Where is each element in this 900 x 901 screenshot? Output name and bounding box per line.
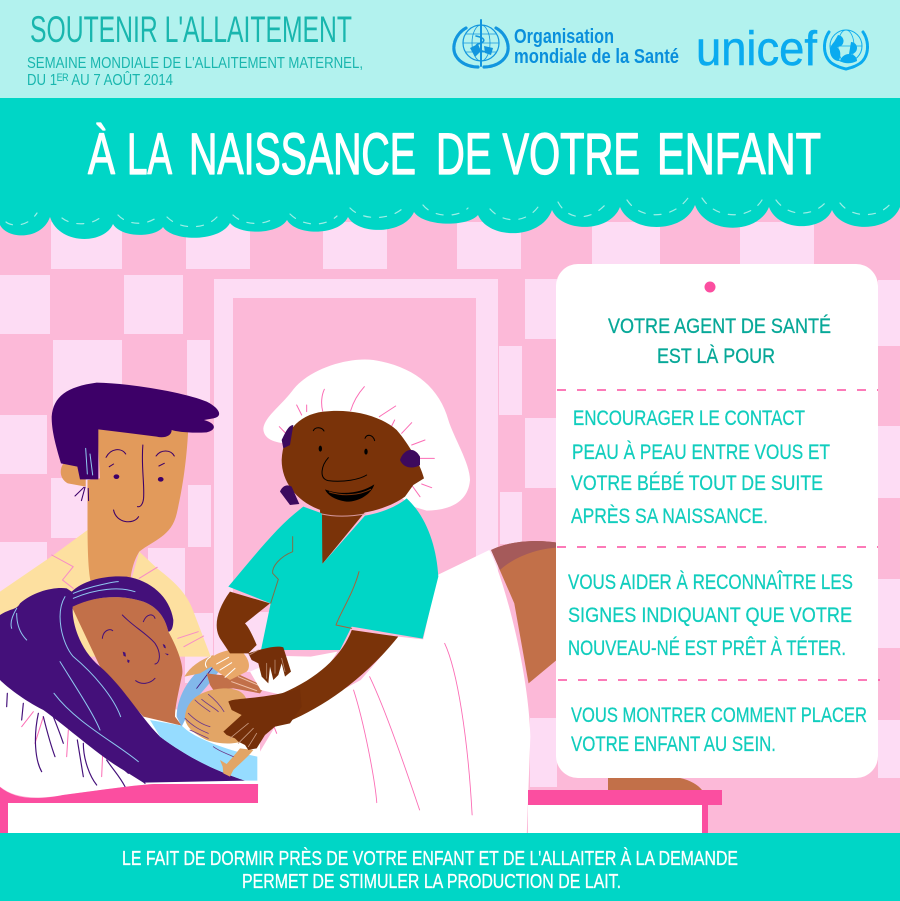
mother's facial features [102,615,159,683]
hair tufts [280,425,420,505]
illustration: birth scene [0,359,561,833]
header subtitle: SEMAINE MONDIALE DE L'ALLAITEMENT MATERNEL, [27,55,363,72]
logo: World Health Organization [454,20,679,68]
left arm [217,592,270,653]
main heading [88,122,821,187]
logo: UNICEF: unicef [696,23,818,76]
nurse's arms [217,592,529,833]
WHO name [514,26,679,68]
awning with scalloped edge [0,98,900,239]
top header band [0,0,900,100]
info card [556,264,880,778]
icon: UNICEF emblem [824,30,868,69]
right hand on baby [223,688,302,750]
point 1 [571,407,830,528]
point 1: ENCOURAGER LE CONTACT [573,407,805,430]
knee, apron and father's body [0,427,561,833]
white sheet fold behind hands [250,652,337,695]
face [282,411,424,514]
father's ear [61,458,86,487]
mother's hair [0,576,245,783]
nurse's white apron [257,550,530,833]
main heading: ENFANT [657,122,821,187]
footer text [122,847,738,893]
WHO name: mondiale de la Santé [514,46,679,68]
father's face and neck [87,427,188,583]
point 3: VOTRE ENFANT AU SEIN. [571,733,776,756]
father's features [75,445,174,522]
footer text: LE FAIT DE DORMIR PRÈS DE VOTRE ENFANT ET DE L'ALLAITER À LA DEMANDE [122,847,738,870]
icon: WHO emblem [454,20,508,67]
hair cap [263,359,470,511]
header subtitle [27,55,363,89]
right forearm [275,630,398,727]
neck V [320,510,367,564]
main heading: NAISSANCE [189,122,416,187]
mother's foot below card [608,778,702,790]
mother's raised knee [491,541,561,683]
point 1: APRÈS SA NAISSANCE. [571,505,768,528]
pin [704,282,716,292]
card heading: VOTRE AGENT DE SANTÉ [608,315,831,338]
header subtitle: DU 1ᴱᴿ AU 7 AOÛT 2014 [27,70,173,89]
white bedsheet [0,673,260,797]
point 1: VOTRE BÉBÉ TOUT DE SUITE [571,472,823,495]
father's shirt [0,530,211,657]
point 1: PEAU À PEAU ENTRE VOUS ET [572,441,830,464]
main heading: DE VOTRE [436,122,640,187]
baby's head and arm [185,688,253,743]
bed frame [0,784,722,833]
point 2 [568,571,853,660]
nurse [228,359,470,650]
card heading: EST LÀ POUR [657,345,775,368]
scrubs [228,498,438,650]
mother's face [72,597,182,726]
baby's blankets [150,720,257,781]
mother, baby and hands [0,576,277,797]
main heading: LA [127,122,172,187]
card body [556,264,878,778]
left hand [248,647,291,683]
point 3 [571,704,867,756]
father's hair [52,383,219,479]
mother's arm and hands [184,655,217,677]
card heading [608,315,831,368]
header title: campaign name: SOUTENIR L'ALLAITEMENT [30,9,352,50]
WHO name: Organisation [514,26,614,48]
point 2: SIGNES INDIQUANT QUE VOTRE [568,604,852,627]
footer text: PERMET DE STIMULER LA PRODUCTION DE LAIT. [242,871,621,893]
footer band [0,833,900,901]
facial features [313,428,375,481]
apron folds [354,643,529,833]
main heading: À [88,122,115,187]
